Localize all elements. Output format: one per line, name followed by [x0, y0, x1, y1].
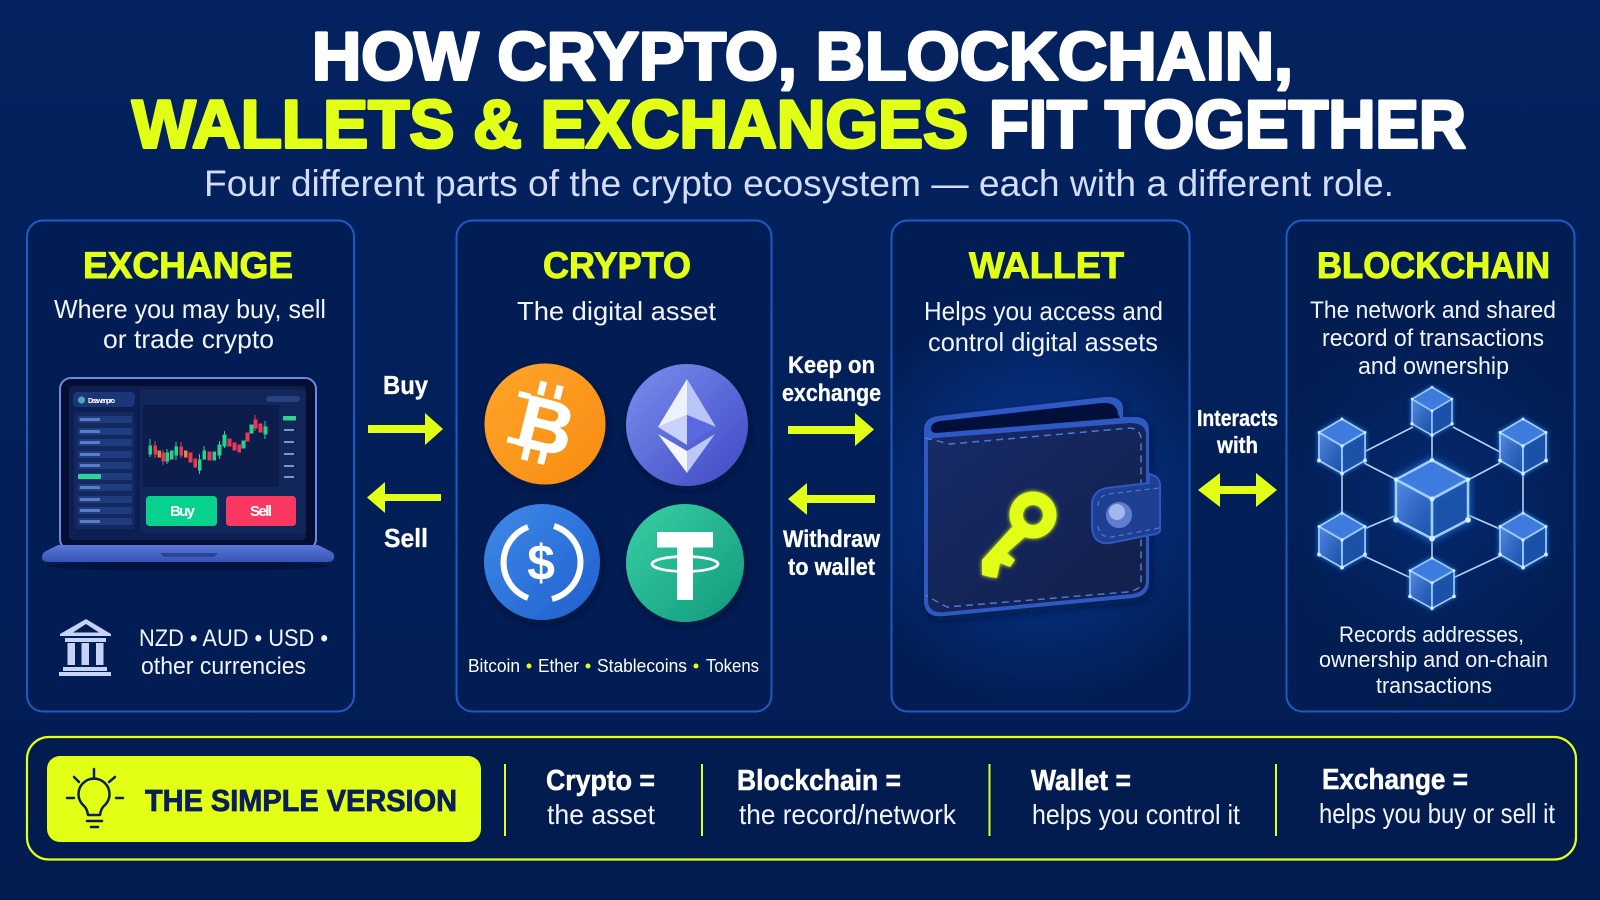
button: buy [146, 496, 217, 526]
currencies text: NZD • AUD • USD • [139, 625, 328, 652]
icon: laptop with trading screen [42, 378, 334, 571]
definition: crypto [546, 765, 655, 830]
definition: blockchain: Blockchain = [737, 765, 901, 797]
definition: blockchain: the record/network [739, 799, 957, 830]
block: upper left [1317, 418, 1367, 476]
definition: wallet [1031, 765, 1240, 830]
icon: usdc coin: $ [527, 535, 555, 591]
description: blockchain [1310, 297, 1556, 380]
candlestick chart [149, 415, 267, 474]
icon: ether coin [626, 364, 748, 486]
icon: bitcoin coin: B [509, 379, 583, 473]
button: sell: Sell [250, 503, 272, 520]
arrow: interacts with: with [1216, 432, 1258, 458]
asset list: Bitcoin [468, 655, 520, 676]
blockchain note: transactions [1376, 673, 1492, 698]
description: crypto: The digital asset [517, 296, 717, 326]
arrow: sell: Sell [384, 523, 428, 553]
divider set [505, 764, 1276, 836]
icon: laptop with trading screen: Dezwenpro [88, 398, 115, 405]
description: blockchain: record of transactions [1322, 325, 1544, 352]
arrow: sell [367, 482, 441, 553]
arrow: withdraw to wallet: Withdraw [783, 526, 880, 553]
icon: bank [59, 619, 111, 676]
blockchain note: Records addresses, [1339, 622, 1524, 647]
title: WALLETS & EXCHANGES [132, 86, 968, 162]
description: wallet [924, 296, 1163, 357]
heading: blockchain: BLOCKCHAIN [1317, 245, 1550, 286]
badge: the simple version [47, 756, 481, 842]
currencies text: other currencies [141, 653, 306, 680]
arrow: withdraw to wallet: to wallet [788, 554, 875, 581]
panel: wallet [892, 220, 1190, 712]
description: exchange [54, 294, 326, 354]
definition: crypto: the asset [547, 799, 655, 830]
blockchain note: ownership and on-chain [1319, 647, 1548, 672]
block: bottom [1408, 557, 1456, 610]
arrow: interacts with [1197, 405, 1278, 507]
asset list: Ether [538, 655, 579, 676]
heading: exchange: EXCHANGE [83, 245, 293, 286]
panel: blockchain [1286, 220, 1574, 712]
block: center [1393, 458, 1471, 541]
block: upper right [1498, 418, 1548, 476]
icon: usdc coin [484, 504, 600, 620]
arrow: interacts with: Interacts [1197, 405, 1278, 431]
asset list: Tokens [706, 655, 759, 676]
title: HOW CRYPTO, BLOCKCHAIN, [312, 18, 1293, 94]
description: exchange: Where you may buy, sell [54, 294, 326, 324]
badge: the simple version: THE SIMPLE VERSION [145, 783, 457, 818]
description: exchange: or trade crypto [103, 324, 274, 354]
icon: bitcoin coin [484, 364, 606, 484]
blockchain note [1319, 622, 1548, 698]
icon: key [982, 492, 1056, 578]
description: blockchain: The network and shared [1310, 297, 1556, 324]
panel: crypto [456, 220, 772, 712]
description: wallet: control digital assets [928, 327, 1158, 357]
diagram: block network [1317, 386, 1548, 610]
title [132, 18, 1466, 162]
arrow: buy [368, 370, 443, 445]
arrow: keep on exchange: Keep on [788, 352, 875, 379]
icon: wallet with key [924, 397, 1160, 616]
panel: the simple version [27, 737, 1576, 860]
definition: crypto: Crypto = [546, 765, 655, 797]
arrow: keep on exchange [782, 352, 881, 446]
block: lower left [1317, 512, 1367, 570]
subtitle: Four different parts of the crypto ecosystem — each with a different role. [204, 163, 1394, 204]
block: lower right [1498, 512, 1548, 570]
title: FIT TOGETHER [989, 86, 1466, 162]
asset list [468, 655, 759, 676]
button: buy: Buy [170, 503, 196, 520]
definition: exchange: helps you buy or sell it [1319, 798, 1555, 829]
definition: blockchain [737, 765, 957, 830]
block: top [1410, 386, 1454, 437]
panel: exchange [27, 220, 354, 712]
arrow: buy: Buy [383, 370, 428, 400]
icon: light bulb [67, 769, 123, 827]
button: sell [226, 496, 296, 526]
heading: wallet: WALLET [969, 245, 1124, 286]
definition: wallet: Wallet = [1031, 765, 1131, 797]
asset list: Stablecoins [597, 655, 687, 676]
heading: crypto: CRYPTO [543, 245, 691, 286]
description: blockchain: and ownership [1358, 353, 1509, 380]
description: wallet: Helps you access and [924, 296, 1163, 326]
arrow: withdraw to wallet [783, 483, 880, 581]
definition: wallet: helps you control it [1032, 799, 1240, 830]
definition: exchange: Exchange = [1322, 764, 1468, 796]
definition: exchange [1319, 764, 1555, 829]
icon: tether coin [626, 504, 744, 622]
currencies text [139, 625, 328, 680]
arrow: keep on exchange: exchange [782, 380, 881, 407]
